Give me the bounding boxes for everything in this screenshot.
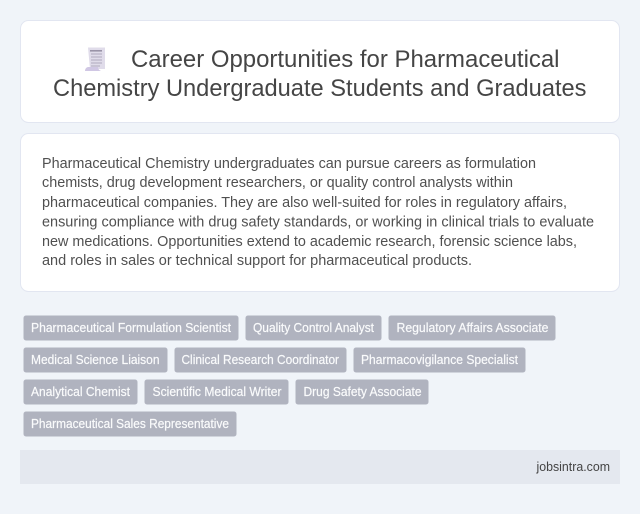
tag: Analytical Chemist [24, 380, 138, 404]
tag: Scientific Medical Writer: Scientific Medical Writer [152, 385, 282, 399]
panel: header card [20, 20, 620, 122]
footer bar [20, 450, 620, 484]
tag: Regulatory Affairs Associate [388, 316, 556, 340]
tag: Pharmaceutical Sales Representative: Pharmaceutical Sales Representative [31, 417, 229, 431]
tag: Pharmacovigilance Specialist [354, 348, 526, 372]
summary text: ensuring compliance with drug safety standards, or working in clinical trials to evaluate [42, 214, 594, 230]
career tags [24, 316, 556, 436]
summary text: pharmaceutical companies. They are also well-suited for roles in regulatory affairs, [42, 195, 567, 211]
tag: Analytical Chemist: Analytical Chemist [31, 385, 130, 399]
tag: Pharmacovigilance Specialist: Pharmacovigilance Specialist [361, 353, 518, 367]
icon: document scroll [85, 48, 105, 71]
tag: Medical Science Liaison [24, 348, 168, 372]
tag: Pharmaceutical Formulation Scientist: Pharmaceutical Formulation Scientist [31, 321, 232, 335]
summary text: Pharmaceutical Chemistry undergraduates can pursue careers as formulation [42, 156, 536, 172]
summary text: chemists, drug development researchers, or quality control analysts within [42, 175, 513, 191]
tag: Pharmaceutical Sales Representative [24, 412, 236, 436]
tag: Drug Safety Associate [296, 380, 428, 404]
tag: Pharmaceutical Formulation Scientist [24, 316, 238, 340]
panel: summary card [20, 134, 620, 292]
tag: Scientific Medical Writer [144, 380, 288, 404]
tag: Drug Safety Associate: Drug Safety Associate [304, 385, 422, 399]
summary text: and roles in sales or technical support for pharmaceutical products. [42, 253, 472, 269]
tag: Clinical Research Coordinator [174, 348, 346, 372]
summary text: new medications. Opportunities extend to academic research, forensic science labs, [42, 234, 577, 250]
title: Chemistry Undergraduate Students and Graduates [53, 75, 586, 102]
tag: Quality Control Analyst [246, 316, 382, 340]
tag: Medical Science Liaison: Medical Science Liaison [31, 353, 160, 367]
title [53, 46, 586, 102]
tag: Clinical Research Coordinator: Clinical Research Coordinator [182, 353, 339, 367]
footer source text: jobsintra.com [536, 460, 610, 474]
tag: Quality Control Analyst: Quality Control Analyst [253, 321, 374, 335]
tag: Regulatory Affairs Associate: Regulatory Affairs Associate [396, 321, 549, 335]
summary text [42, 156, 594, 269]
title: Career Opportunities for Pharmaceutical [131, 46, 560, 73]
